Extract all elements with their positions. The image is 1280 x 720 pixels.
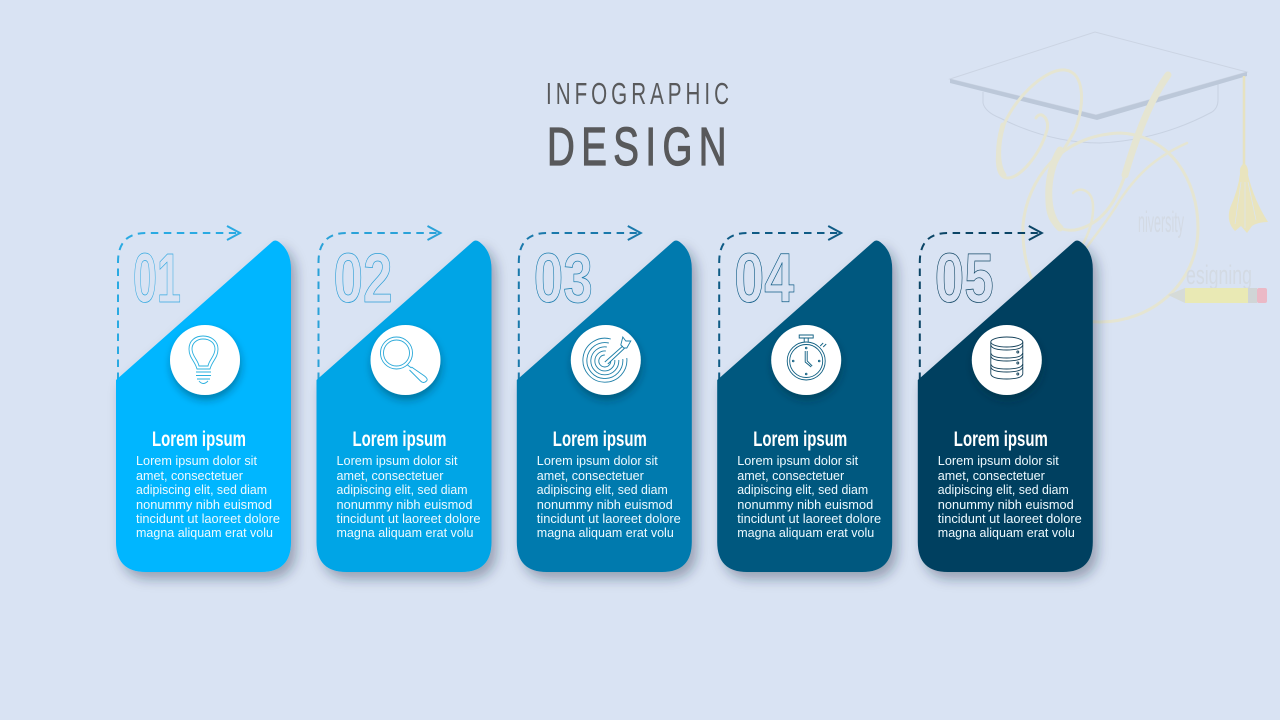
card 03: [517, 240, 692, 572]
text 05: nonummy nibh euismod: [938, 498, 1074, 512]
panel: step 03: [517, 226, 692, 572]
text 01: amet, consectetuer: [136, 469, 243, 483]
text 03: nonummy nibh euismod: [537, 498, 673, 512]
text 04: [737, 454, 881, 540]
text 05: adipiscing elit, sed diam: [938, 483, 1069, 497]
card 02: [316, 240, 492, 572]
text 02: [336, 454, 481, 540]
text 01: Lorem ipsum dolor sit: [136, 454, 258, 468]
panel: step 02: [316, 226, 492, 572]
text 04: magna aliquam erat volu: [737, 526, 874, 540]
text 03: [537, 454, 681, 540]
text 05: magna aliquam erat volu: [938, 526, 1075, 540]
heading 01: Lorem ipsum: [152, 428, 246, 451]
watermark: graduation cap: [950, 32, 1247, 143]
text 03: magna aliquam erat volu: [537, 526, 674, 540]
arrow 01: [118, 226, 240, 380]
arrow 04: [719, 226, 841, 380]
heading 02: Lorem ipsum: [352, 428, 446, 451]
text 04: nonummy nibh euismod: [737, 498, 873, 512]
panel: step 05: [918, 226, 1093, 572]
title line 2: DESIGN: [547, 117, 733, 177]
text 04: adipiscing elit, sed diam: [737, 483, 868, 497]
text 04: amet, consectetuer: [737, 469, 844, 483]
arrow 02: [318, 226, 440, 380]
text 02: adipiscing elit, sed diam: [336, 483, 468, 497]
watermark: university logo: [950, 32, 1268, 322]
panel: step 04: [717, 226, 892, 572]
number 02: 02: [334, 239, 392, 317]
text 02: tincidunt ut laoreet dolore: [336, 512, 481, 526]
card 04: [717, 240, 892, 572]
arrow 05: [920, 226, 1042, 380]
text 03: amet, consectetuer: [537, 469, 644, 483]
title line 1: INFOGRAPHIC: [546, 76, 733, 111]
heading 05: Lorem ipsum: [954, 428, 1048, 451]
arrow 03: [519, 226, 641, 380]
text 02: Lorem ipsum dolor sit: [336, 454, 458, 468]
text 04: Lorem ipsum dolor sit: [737, 454, 859, 468]
icon: magnifying glass: [370, 325, 440, 395]
card 05: [918, 240, 1093, 572]
text 01: adipiscing elit, sed diam: [136, 483, 267, 497]
text 02: amet, consectetuer: [336, 469, 444, 483]
text 05: tincidunt ut laoreet dolore: [938, 512, 1082, 526]
text 01: tincidunt ut laoreet dolore: [136, 512, 280, 526]
number 04: 04: [734, 239, 794, 317]
watermark: pencil: [1168, 288, 1267, 303]
icon: light bulb: [170, 325, 240, 395]
text 05: [938, 454, 1082, 540]
text 03: tincidunt ut laoreet dolore: [537, 512, 681, 526]
card 01: [116, 240, 291, 572]
text 01: [136, 454, 280, 540]
watermark: university logo: niversity: [1138, 206, 1184, 239]
heading 03: Lorem ipsum: [553, 428, 647, 451]
watermark: tassel: [1229, 76, 1268, 233]
text 05: amet, consectetuer: [938, 469, 1045, 483]
text 02: magna aliquam erat volu: [336, 526, 474, 540]
panel: step 01: [116, 226, 291, 572]
text 05: Lorem ipsum dolor sit: [938, 454, 1059, 468]
watermark: script monogram: [997, 70, 1198, 322]
text 01: magna aliquam erat volu: [136, 526, 273, 540]
number 01: 01: [133, 239, 181, 317]
text 01: nonummy nibh euismod: [136, 498, 272, 512]
number 05: 05: [935, 239, 994, 317]
text 02: nonummy nibh euismod: [336, 498, 473, 512]
number 03: 03: [534, 239, 593, 317]
text 04: tincidunt ut laoreet dolore: [737, 512, 881, 526]
heading 04: Lorem ipsum: [753, 428, 847, 451]
text 03: Lorem ipsum dolor sit: [537, 454, 658, 468]
icon: database: [972, 325, 1042, 395]
icon: target with arrow: [571, 325, 641, 395]
title: [546, 76, 733, 177]
icon: stopwatch: [771, 325, 841, 395]
text 03: adipiscing elit, sed diam: [537, 483, 668, 497]
